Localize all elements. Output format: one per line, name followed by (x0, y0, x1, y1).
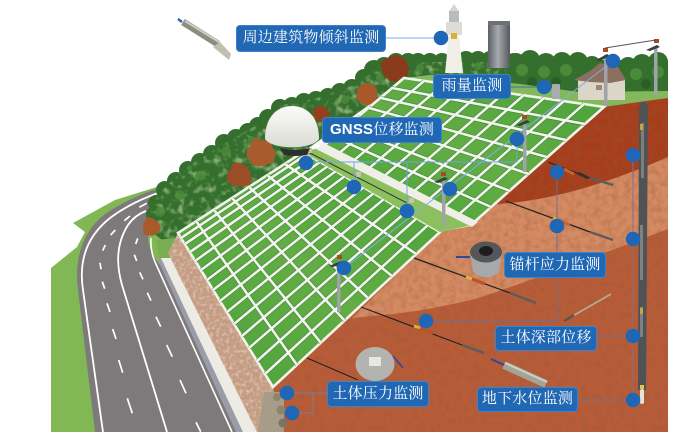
anchor rod 5 (307, 358, 358, 380)
pole far right (646, 39, 660, 95)
berm white path (316, 143, 478, 227)
connector lines (287, 38, 633, 413)
soil dark top layer (497, 98, 668, 204)
top grass terrace (404, 75, 668, 108)
anchor rod 3 (414, 258, 536, 303)
label: earth pressure (327, 381, 429, 407)
label: groundwater level (477, 387, 578, 412)
icon: GNSS dome (265, 106, 319, 156)
anchor rod 4 (361, 307, 484, 353)
tree belt (146, 51, 668, 248)
upper grid slope (322, 78, 604, 224)
pole slope upper (516, 115, 530, 172)
tree belt right of rain gauge (507, 50, 668, 98)
label: groundwater level: 地下水位监测 (482, 391, 573, 407)
label: deep soil displacement: 土体深部位移 (500, 330, 592, 346)
small rain gauge (552, 84, 560, 99)
anchor rods (307, 162, 613, 380)
road curb (157, 253, 258, 432)
icon: displacement probe (564, 294, 611, 321)
grass pad by wall (156, 238, 175, 258)
label: GNSS displacement: GNSS位移监测 (330, 121, 434, 138)
icon: rain gauge (488, 21, 510, 68)
road (77, 188, 240, 432)
label: earth pressure: 土体压力监测 (332, 386, 424, 402)
berm survey wire (308, 152, 407, 203)
autumn trees (142, 55, 408, 237)
marker dots (280, 31, 640, 420)
lower grid slope (178, 152, 440, 387)
soil light layer (352, 157, 668, 318)
survey posts (307, 148, 414, 203)
label: anchor stress: 锚杆应力监测 (509, 257, 601, 273)
icon: anchor load cell (456, 242, 502, 278)
soil body (273, 98, 668, 432)
roadside grass (51, 186, 170, 432)
pole slope mid (434, 172, 448, 226)
pole slope lower (329, 255, 344, 312)
label: deep soil displacement (495, 326, 597, 351)
anchor rod 2 (506, 201, 613, 240)
house (574, 63, 626, 100)
pole by house (596, 48, 610, 106)
icon: tilt sensor (178, 19, 231, 60)
monitoring poles (307, 39, 660, 312)
icon: lighthouse tilt target (445, 4, 463, 73)
icon: earth pressure cell (347, 347, 403, 382)
berm grass strip (303, 147, 473, 232)
stone retaining wall (168, 233, 288, 432)
label: building tilt: 周边建筑物倾斜监测 (243, 30, 379, 46)
icon: water level gauge (491, 359, 547, 384)
label: rainfall (433, 74, 511, 99)
label: building tilt (236, 25, 386, 52)
label: rainfall: 雨量监测 (442, 78, 502, 94)
anchor rod 1 (548, 162, 613, 185)
label: GNSS displacement (322, 117, 442, 143)
deep displacement casing (638, 102, 648, 404)
label: anchor stress (504, 252, 606, 278)
